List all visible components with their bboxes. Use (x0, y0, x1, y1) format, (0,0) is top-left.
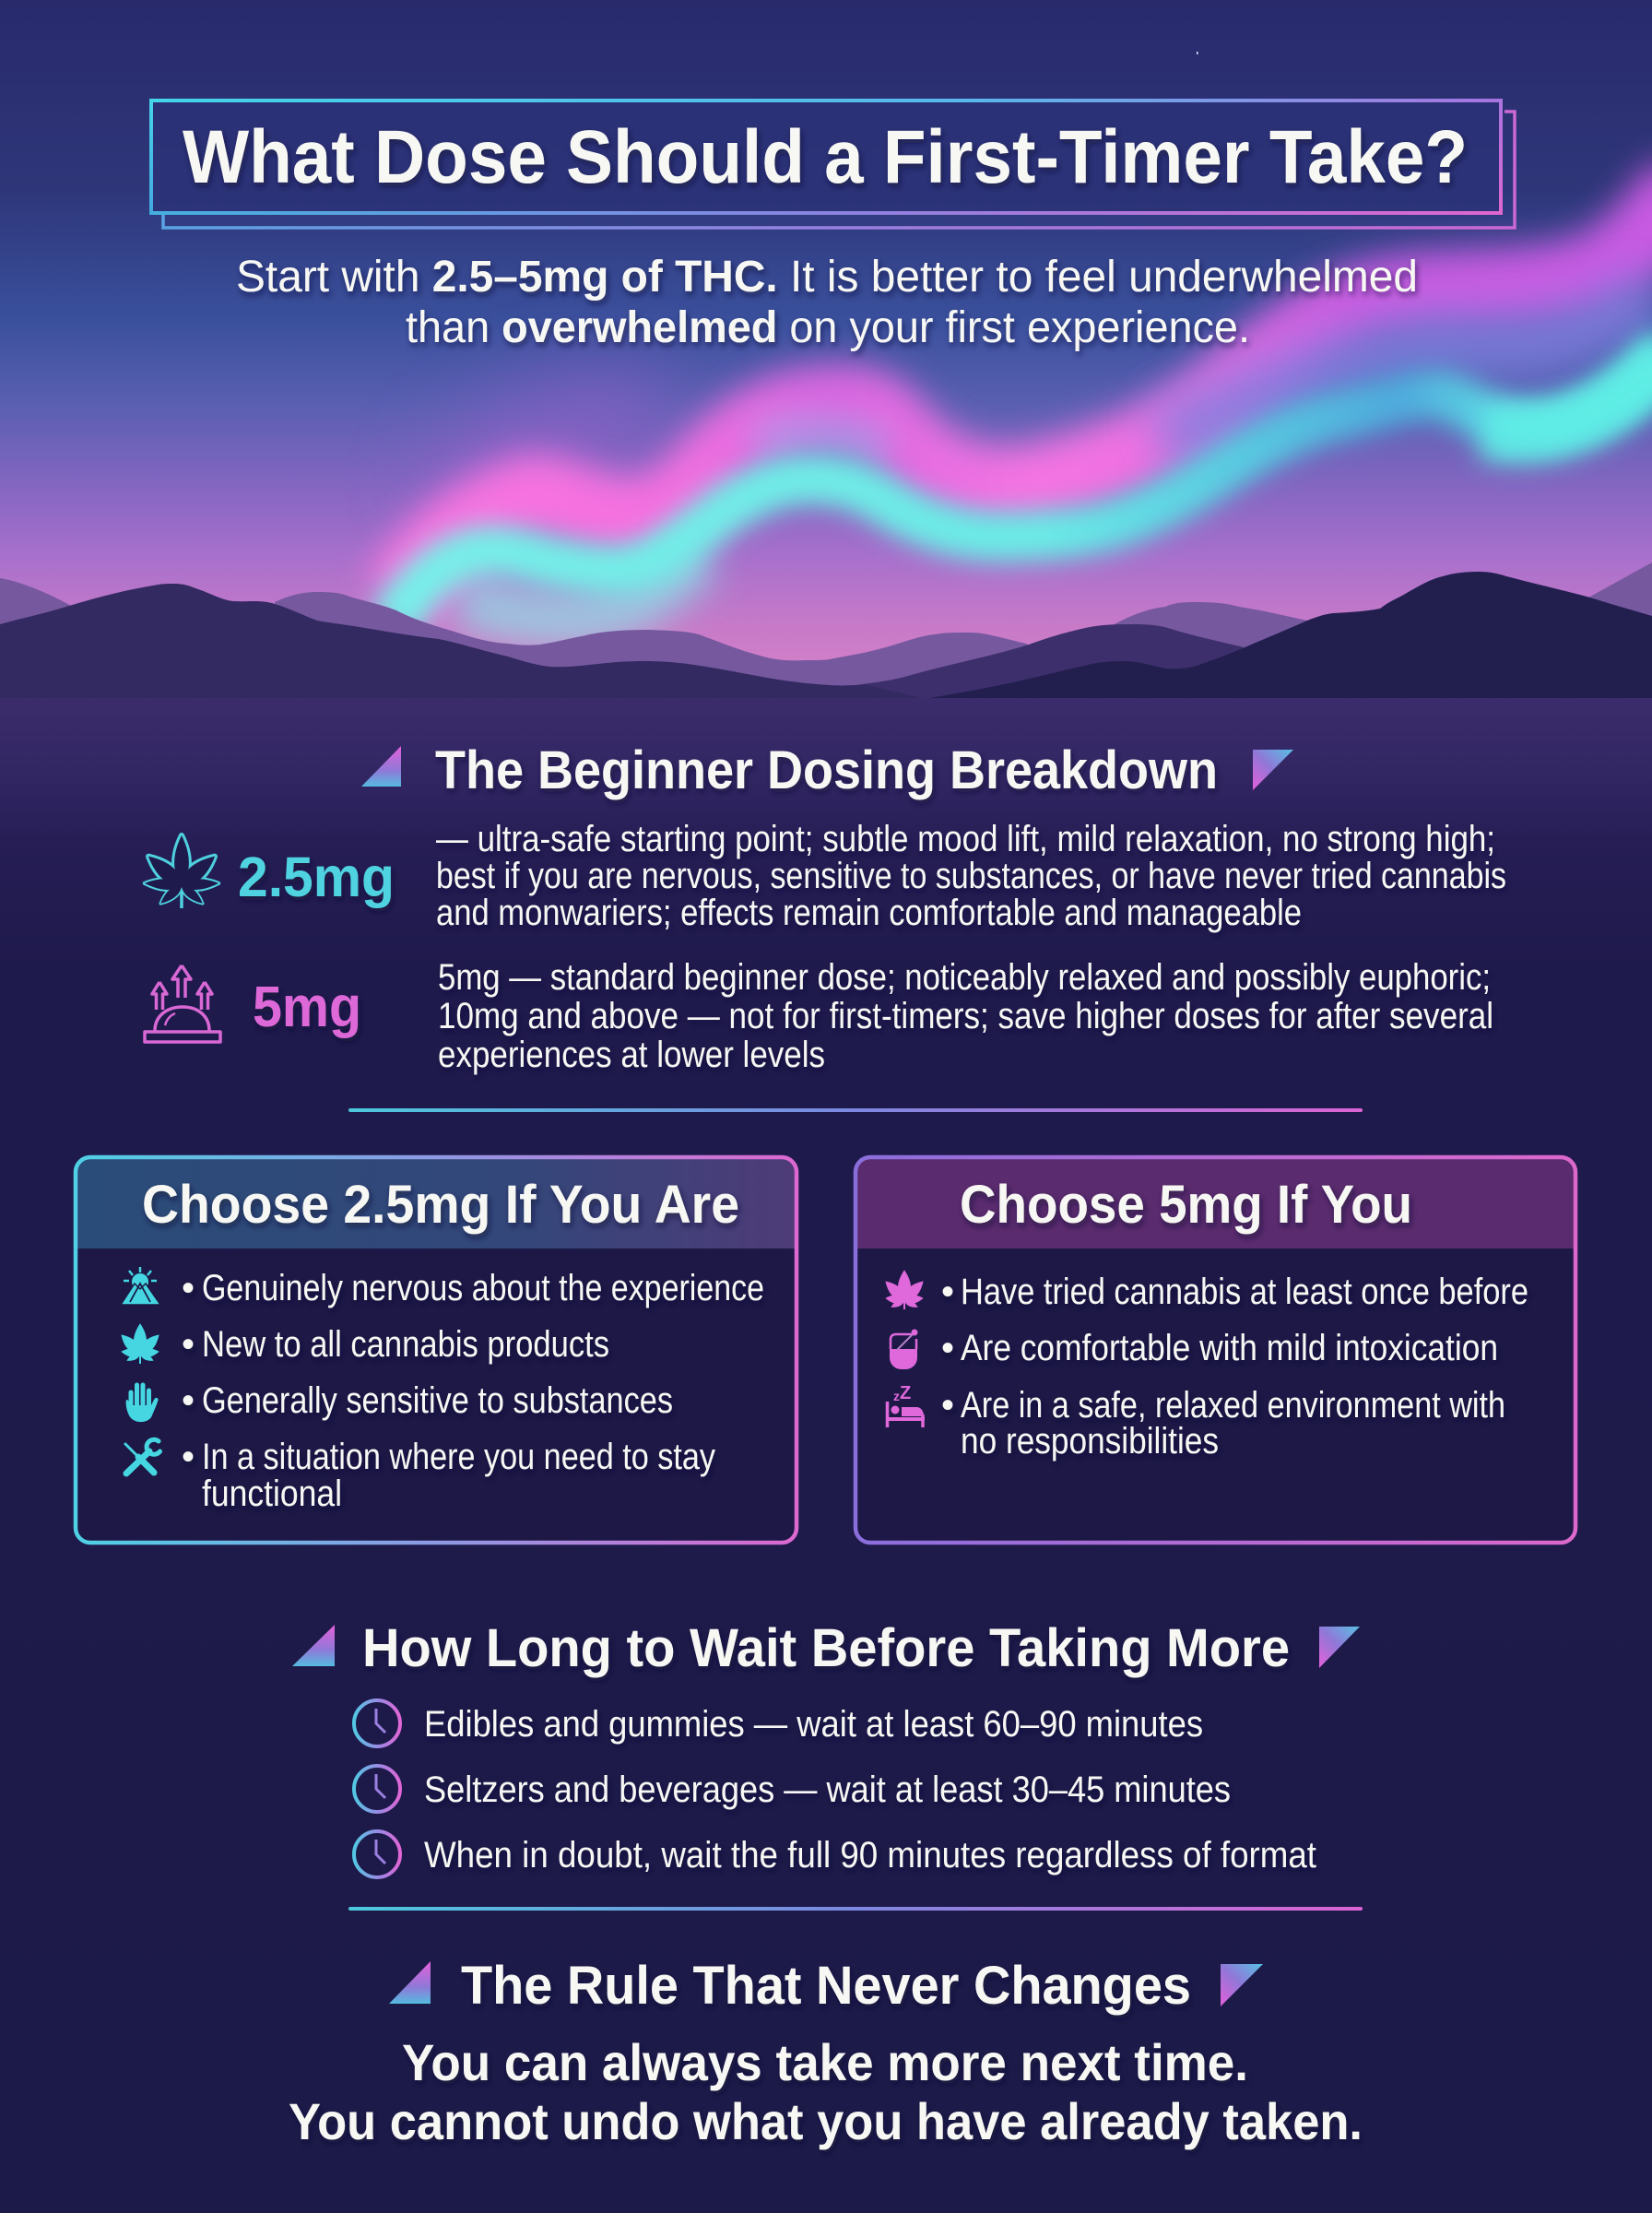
icon: clock 3 (354, 1831, 400, 1877)
list: choose 2.5mg reasons: New to all cannabis products (202, 1324, 609, 1365)
heading: how long to wait: How Long to Wait Before Taking More (362, 1618, 1290, 1678)
description: 2.5mg: and monwariers; effects remain comfortable and manageable (436, 893, 1302, 933)
panel header: choose 5mg (856, 1157, 1575, 1249)
lower background (0, 698, 1652, 2213)
icon: hand (126, 1385, 159, 1422)
dose row: 2.5mg (143, 819, 1506, 933)
aurora illustration (392, 184, 1652, 751)
title: What Dose Should a First-Timer Take? (183, 115, 1468, 199)
list: choose 2.5mg reasons: Generally sensitive to substances (202, 1380, 673, 1421)
icon: filled pink leaf (881, 1270, 927, 1310)
list: choose 5mg reasons: • (941, 1385, 954, 1426)
icon: drink cup (890, 1330, 918, 1369)
description: 5mg: experiences at lower levels (438, 1035, 825, 1075)
description: 2.5mg (436, 819, 1506, 933)
title box (151, 99, 1515, 228)
list: choose 5mg reasons: • (941, 1272, 954, 1312)
list: choose 5mg reasons: • (941, 1328, 954, 1368)
list: wait times (354, 1700, 1316, 1877)
panel title: choose 5mg: Choose 5mg If You (960, 1175, 1412, 1235)
wait time text (424, 1704, 1316, 1876)
heading: beginner dosing breakdown: The Beginner Dosing Breakdown (435, 740, 1218, 800)
mountains (0, 562, 1652, 701)
closing statement: You can always take more next time. (402, 2033, 1248, 2091)
wait time text: When in doubt, wait the full 90 minutes regardless of format (424, 1835, 1316, 1876)
icon: filled leaf (117, 1323, 163, 1364)
icon: clock 2 (354, 1766, 400, 1812)
panel: choose 5mg (856, 1157, 1575, 1543)
wait time text: Seltzers and beverages — wait at least 30–45 minutes (424, 1769, 1231, 1810)
list: choose 2.5mg reasons: • (182, 1268, 195, 1308)
description: 5mg (438, 957, 1493, 1075)
icon: bed with zzz: z (893, 1389, 900, 1403)
list: choose 5mg reasons: Are comfortable with mild intoxication (961, 1328, 1498, 1368)
icon: bed with zzz: Z (900, 1383, 911, 1403)
dose label: 2.5mg: 2.5mg (238, 846, 395, 908)
description: 5mg: 10mg and above — not for first-timers; save higher doses for after several (438, 996, 1493, 1036)
icon: clock 1 (354, 1700, 400, 1746)
closing statement: You cannot undo what you have already taken. (289, 2092, 1363, 2150)
closing statement (289, 2033, 1363, 2150)
panel: choose 2.5mg (76, 1157, 796, 1543)
list: choose 2.5mg reasons: • (182, 1437, 195, 1477)
list: choose 5mg reasons: Have tried cannabis at least once before (961, 1272, 1528, 1312)
heading: the rule that never changes: The Rule That Never Changes (461, 1956, 1191, 2016)
icon: mountain and sun (121, 1267, 160, 1305)
list: choose 2.5mg reasons: • (182, 1324, 195, 1365)
icon: bed with zzz (887, 1383, 925, 1427)
dose row: 5mg (145, 957, 1493, 1075)
list: choose 5mg reasons: Are in a safe, relaxed environment with (961, 1385, 1505, 1426)
description: 5mg: 5mg — standard beginner dose; noticeably relaxed and possibly euphoric; (438, 957, 1491, 998)
wait time text: Edibles and gummies — wait at least 60–90 minutes (424, 1704, 1203, 1745)
list: choose 2.5mg reasons (182, 1268, 764, 1514)
dose label: 5mg: 5mg (253, 976, 361, 1039)
panel header: choose 2.5mg (76, 1157, 796, 1249)
description: 2.5mg: — ultra-safe starting point; subtle mood lift, mild relaxation, no strong high; (436, 819, 1495, 859)
list: choose 5mg reasons: no responsibilities (961, 1421, 1219, 1462)
list: choose 2.5mg reasons: • (182, 1380, 195, 1421)
subtitle (236, 253, 1418, 352)
panel title: choose 2.5mg: Choose 2.5mg If You Are (142, 1175, 739, 1235)
list: choose 2.5mg reasons: In a situation where you need to stay (202, 1437, 715, 1477)
background sky (0, 0, 1652, 698)
list: choose 2.5mg reasons: Genuinely nervous about the experience (202, 1268, 764, 1308)
icon: outline cannabis leaf (143, 835, 220, 908)
icon: dome with rising arrows (145, 965, 220, 1042)
subtitle: than overwhelmed on your first experience. (406, 303, 1250, 352)
subtitle: Start with 2.5–5mg of THC. It is better to feel underwhelmed (236, 253, 1418, 302)
list: choose 2.5mg reasons: functional (202, 1473, 342, 1514)
list: choose 5mg reasons (941, 1272, 1528, 1462)
icon: tools (125, 1439, 160, 1473)
